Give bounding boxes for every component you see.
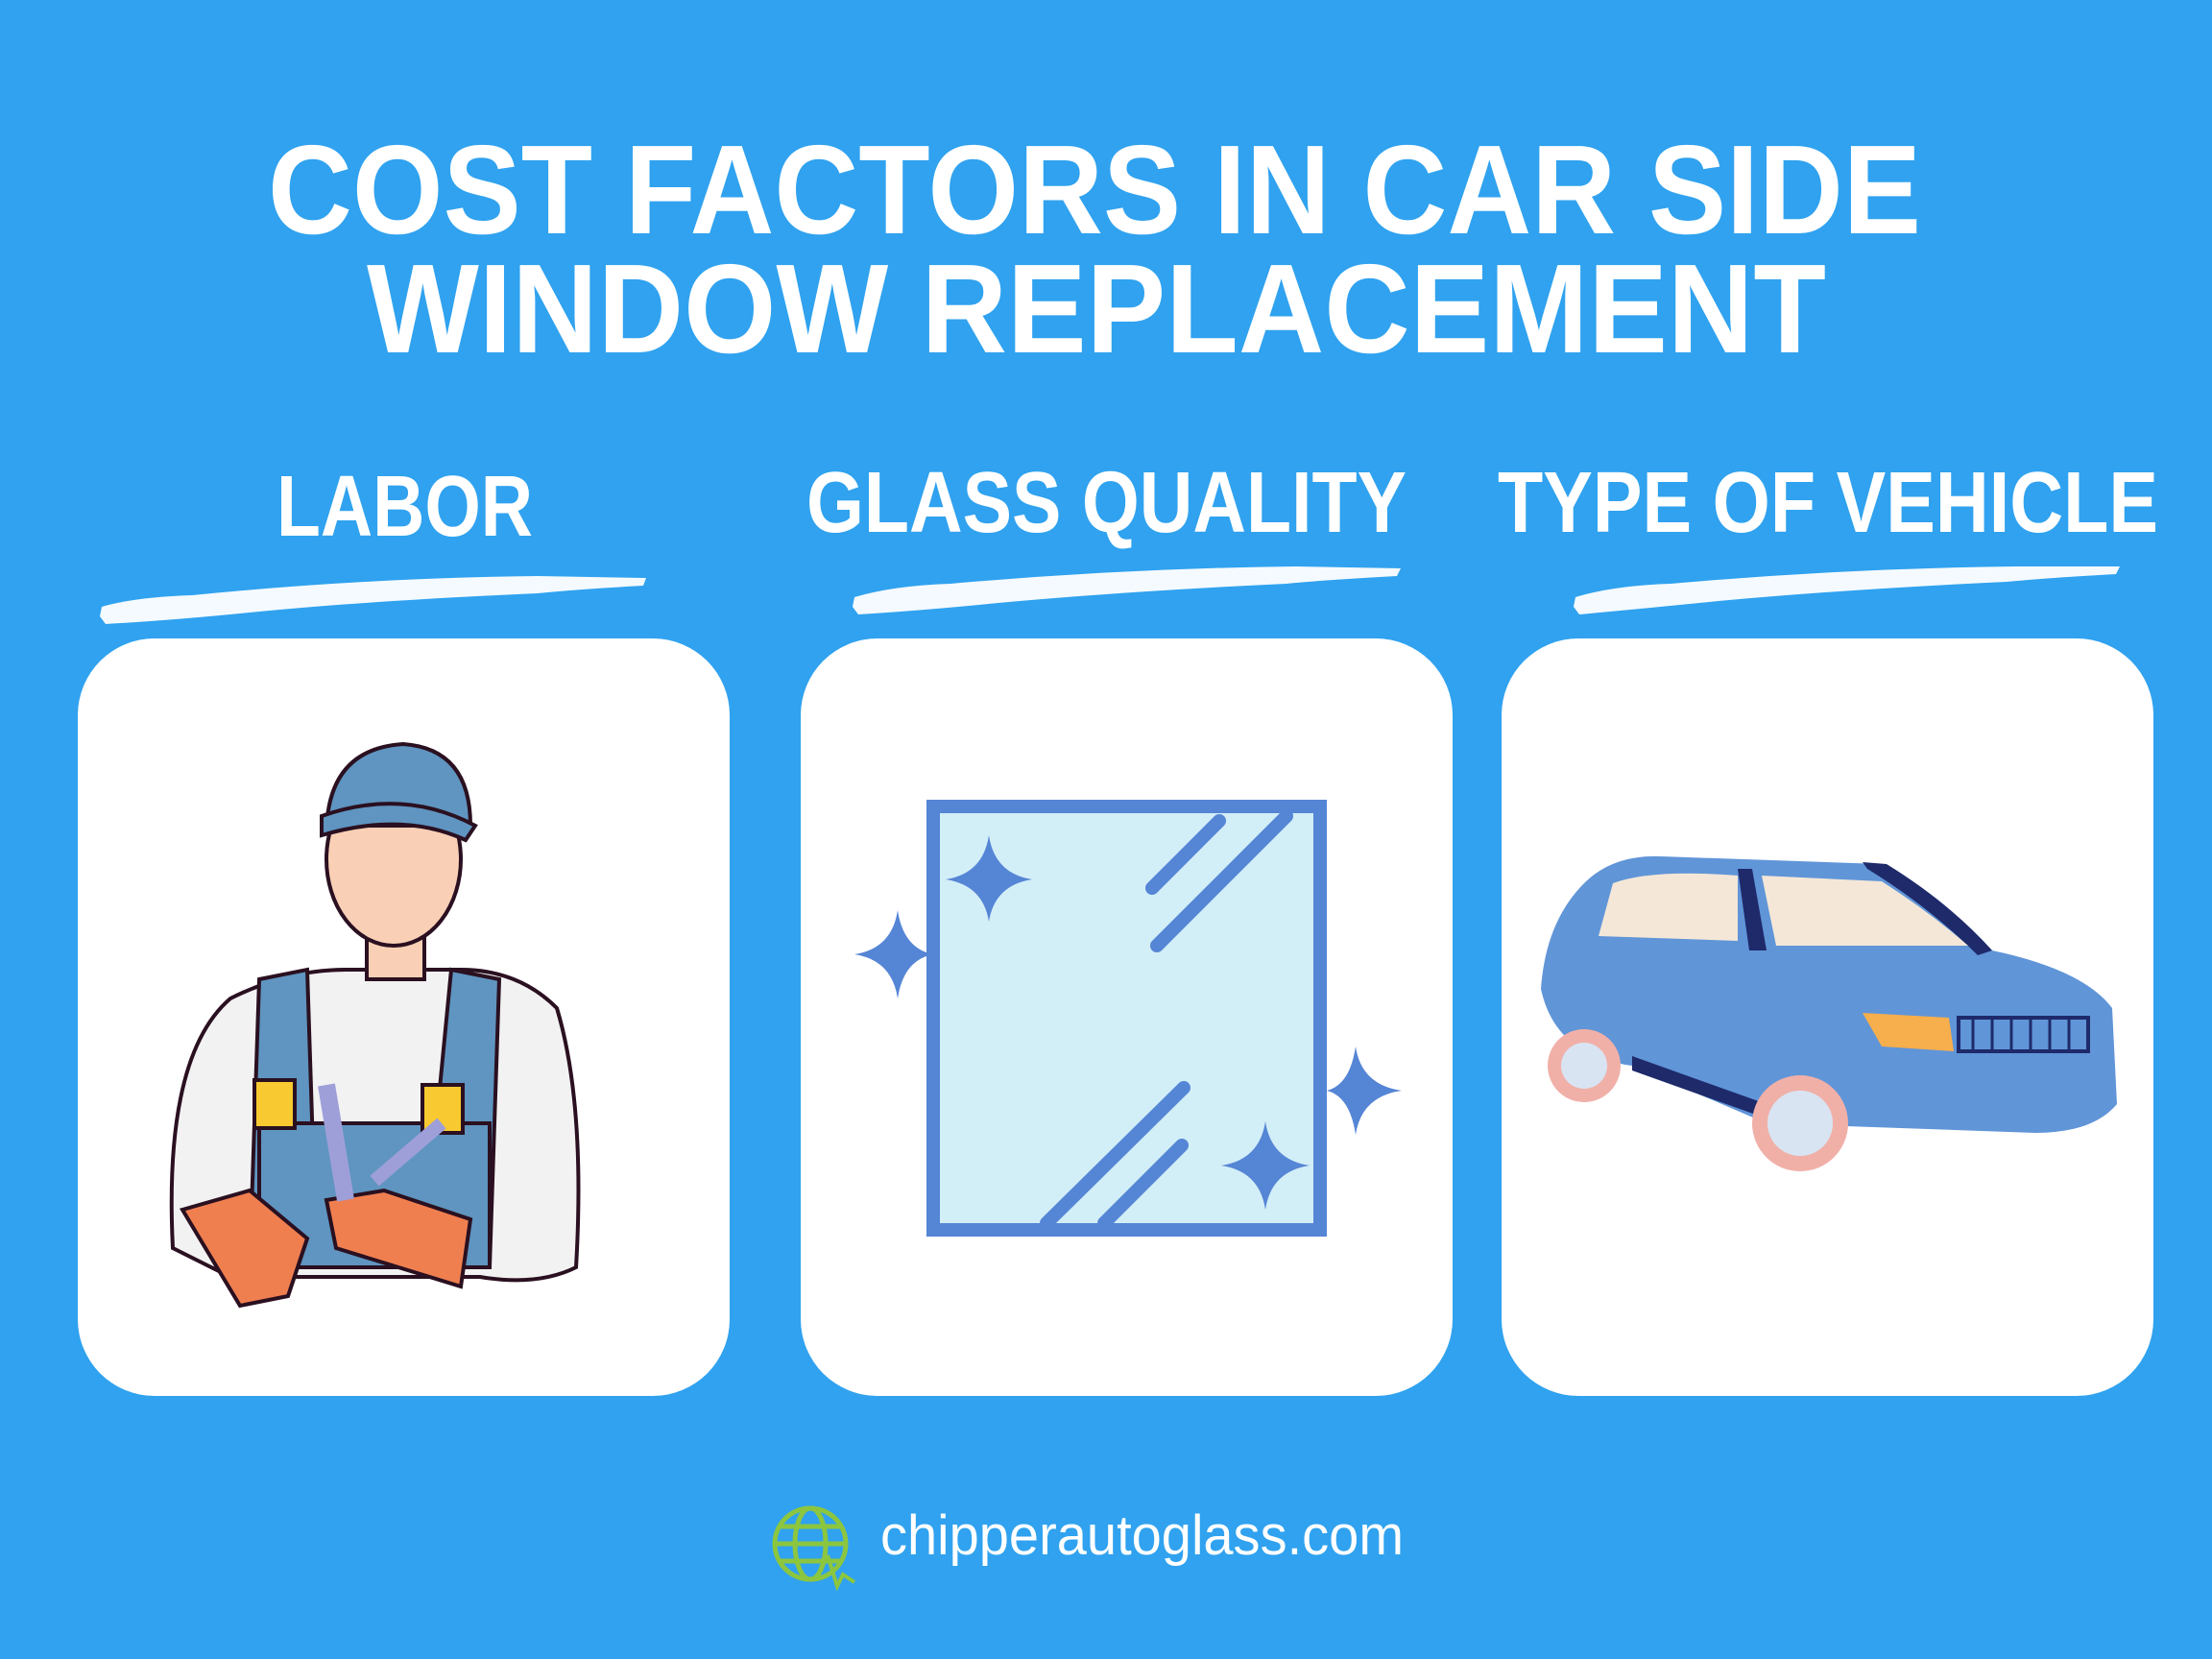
- icon: car: [1541, 856, 2117, 1171]
- heading: labor: LABOR: [276, 459, 533, 555]
- brush stroke: labor: [100, 576, 646, 624]
- footer: [775, 1504, 1404, 1586]
- panel: type of vehicle: [1502, 638, 2153, 1396]
- title: [268, 119, 1921, 379]
- panel: glass quality: [801, 638, 1453, 1396]
- title: COST FACTORS IN CAR SIDE: [268, 119, 1921, 260]
- icon: sparkles: [854, 835, 1402, 1210]
- footer url: chipperautoglass.com: [880, 1504, 1404, 1567]
- heading: glass quality: GLASS QUALITY: [806, 455, 1407, 551]
- title: WINDOW REPLACEMENT: [367, 238, 1826, 379]
- icon: worker: [172, 744, 578, 1306]
- brush stroke: glass: [853, 566, 1401, 614]
- brush stroke: vehicle: [1574, 566, 2120, 614]
- icon: glass pane: [933, 806, 1320, 1230]
- icon: globe: [775, 1508, 854, 1586]
- panel: labor: [78, 638, 730, 1396]
